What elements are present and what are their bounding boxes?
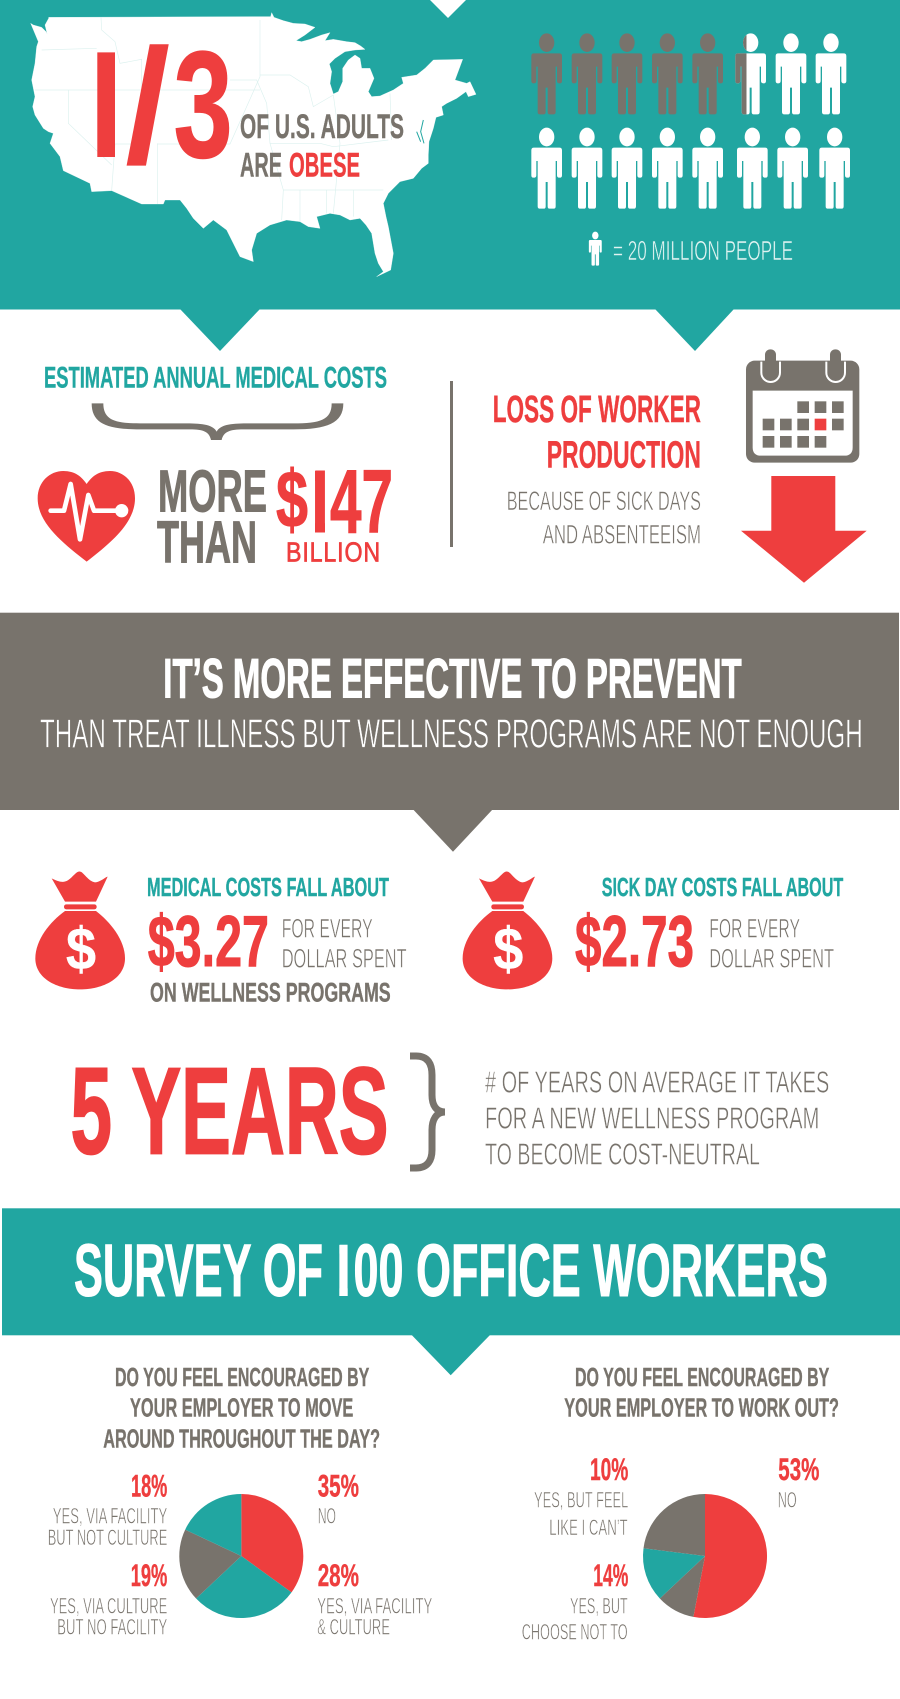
label: 18%: YES, VIA FACILITY — [53, 1503, 167, 1528]
heading: ESTIMATED ANNUAL MEDICAL COSTS — [44, 361, 387, 394]
label: 14% — [522, 1557, 628, 1644]
banner background — [2, 1208, 900, 1335]
heading: PRODUCTION — [547, 434, 701, 476]
panel: estimated annual medical costs — [38, 361, 393, 575]
panel: five years to cost neutral — [70, 1042, 829, 1180]
label: 10%: 10% — [590, 1451, 628, 1487]
caption: ON WELLNESS PROGRAMS — [150, 978, 391, 1008]
heading — [493, 389, 701, 476]
label: 28%: 28% — [318, 1557, 359, 1593]
label: 35% — [318, 1468, 359, 1528]
pointer: right — [655, 309, 734, 351]
curly brace — [410, 1056, 445, 1168]
panel: loss of worker production — [493, 349, 867, 583]
label: FOR EVERY — [709, 913, 800, 943]
label: of U.S. adults are obese: OF U.S. ADULTS — [240, 108, 404, 146]
heading: 1 — [325, 1230, 359, 1312]
legend: one icon equals 20 million people — [589, 232, 793, 266]
label: FOR EVERY — [282, 913, 373, 943]
curly brace — [92, 403, 343, 440]
label: 14%: YES, BUT — [570, 1593, 628, 1618]
banner background — [0, 613, 899, 810]
body text: AND ABSENTEEISM — [543, 519, 701, 549]
panel: sick day costs fall — [463, 872, 843, 989]
label: of U.S. adults are obese — [240, 108, 404, 185]
divider — [450, 381, 453, 547]
text: more than — [157, 459, 267, 575]
question: DO YOU FEEL ENCOURAGED BY — [115, 1362, 369, 1392]
label: 14%: 14% — [593, 1557, 628, 1593]
statistic: 1/3: 3 — [174, 19, 233, 189]
label: 53%: 53% — [778, 1451, 819, 1487]
white notch at top — [430, 0, 466, 18]
label: 35%: 35% — [318, 1468, 359, 1504]
teal header background — [0, 0, 900, 310]
question: AROUND THROUGHOUT THE DAY? — [103, 1423, 380, 1453]
statistic: 1/3: 1 — [64, 19, 140, 190]
icon: money bag — [35, 872, 125, 989]
statistic: 1/3: / — [125, 14, 170, 197]
label: 53% — [778, 1451, 819, 1512]
question — [564, 1362, 839, 1423]
statistic: $147 billion: 47 — [330, 453, 393, 553]
heading — [74, 1243, 826, 1297]
question: YOUR EMPLOYER TO MOVE — [130, 1393, 353, 1423]
icon: money bag — [463, 872, 552, 989]
description — [485, 1066, 829, 1171]
label: 35%: NO — [318, 1503, 336, 1528]
icon: heart with pulse — [38, 471, 135, 562]
label: 18%: BUT NOT CULTURE — [48, 1525, 167, 1550]
pictogram: people — [531, 33, 850, 209]
label — [282, 913, 407, 973]
arrow: down — [741, 476, 867, 583]
label: 10%: LIKE I CAN’T — [549, 1515, 628, 1540]
statistic: $147 billion: 1 — [298, 452, 338, 553]
label: 28% — [317, 1557, 432, 1639]
body text — [507, 486, 701, 549]
pointer — [413, 809, 493, 852]
label: 19%: YES, VIA CULTURE — [50, 1593, 167, 1618]
map of the United States — [31, 13, 476, 277]
body text: BECAUSE OF SICK DAYS — [507, 486, 701, 516]
description: TO BECOME COST-NEUTRAL — [485, 1137, 760, 1171]
statistic: $147 billion: $ — [276, 455, 308, 545]
label: 10% — [534, 1451, 628, 1540]
panel: medical costs fall — [35, 872, 407, 1008]
pie chart — [643, 1494, 767, 1618]
label: 19% — [50, 1557, 167, 1639]
label: DOLLAR SPENT — [282, 943, 407, 973]
half gray person overlay — [735, 35, 746, 114]
label: 28%: & CULTURE — [317, 1614, 390, 1639]
text: more than: MORE — [158, 459, 267, 525]
label: 53%: NO — [778, 1487, 797, 1512]
heading: SURVEY OF — [74, 1229, 323, 1312]
pointer: left — [180, 309, 260, 351]
label: 19%: 19% — [131, 1557, 167, 1593]
label: 14%: CHOOSE NOT TO — [522, 1619, 628, 1644]
icon: money bag: $ — [493, 916, 523, 982]
panel: survey question move — [48, 1362, 432, 1639]
statistic: $147 billion: BILLION — [286, 537, 381, 568]
statistic: $3.27 — [148, 902, 269, 982]
pie chart — [179, 1494, 303, 1618]
panel: obesity statistics — [0, 0, 900, 351]
label: of U.S. adults are obese: OBESE — [289, 147, 360, 185]
label: 28%: YES, VIA FACILITY — [317, 1593, 432, 1618]
label: 19%: BUT NO FACILITY — [57, 1614, 167, 1639]
statistic: $147 billion — [276, 466, 391, 562]
panel: survey question work out — [522, 1362, 839, 1644]
heading: LOSS OF WORKER — [493, 389, 701, 431]
banner: survey — [2, 1208, 900, 1375]
label: of U.S. adults are obese: ARE — [240, 147, 282, 185]
statistic: $2.73 — [575, 902, 694, 982]
statistic: 5 years: 5 YEARS — [70, 1042, 388, 1180]
label: 18%: 18% — [131, 1468, 167, 1504]
icon: money bag: $ — [66, 916, 96, 982]
legend: one icon equals 20 million people: = 20 MILLION PEOPLE — [613, 235, 793, 266]
question — [103, 1362, 380, 1453]
icon: calendar — [746, 349, 859, 463]
label — [709, 913, 834, 973]
pointer — [412, 1335, 490, 1375]
statistic: 1/3 — [97, 44, 230, 166]
text: more than: THAN — [157, 509, 257, 575]
label: 18% — [48, 1468, 167, 1550]
banner: prevention message — [0, 613, 899, 852]
label: 10%: YES, BUT FEEL — [534, 1487, 628, 1512]
heading: MEDICAL COSTS FALL ABOUT — [147, 872, 389, 902]
